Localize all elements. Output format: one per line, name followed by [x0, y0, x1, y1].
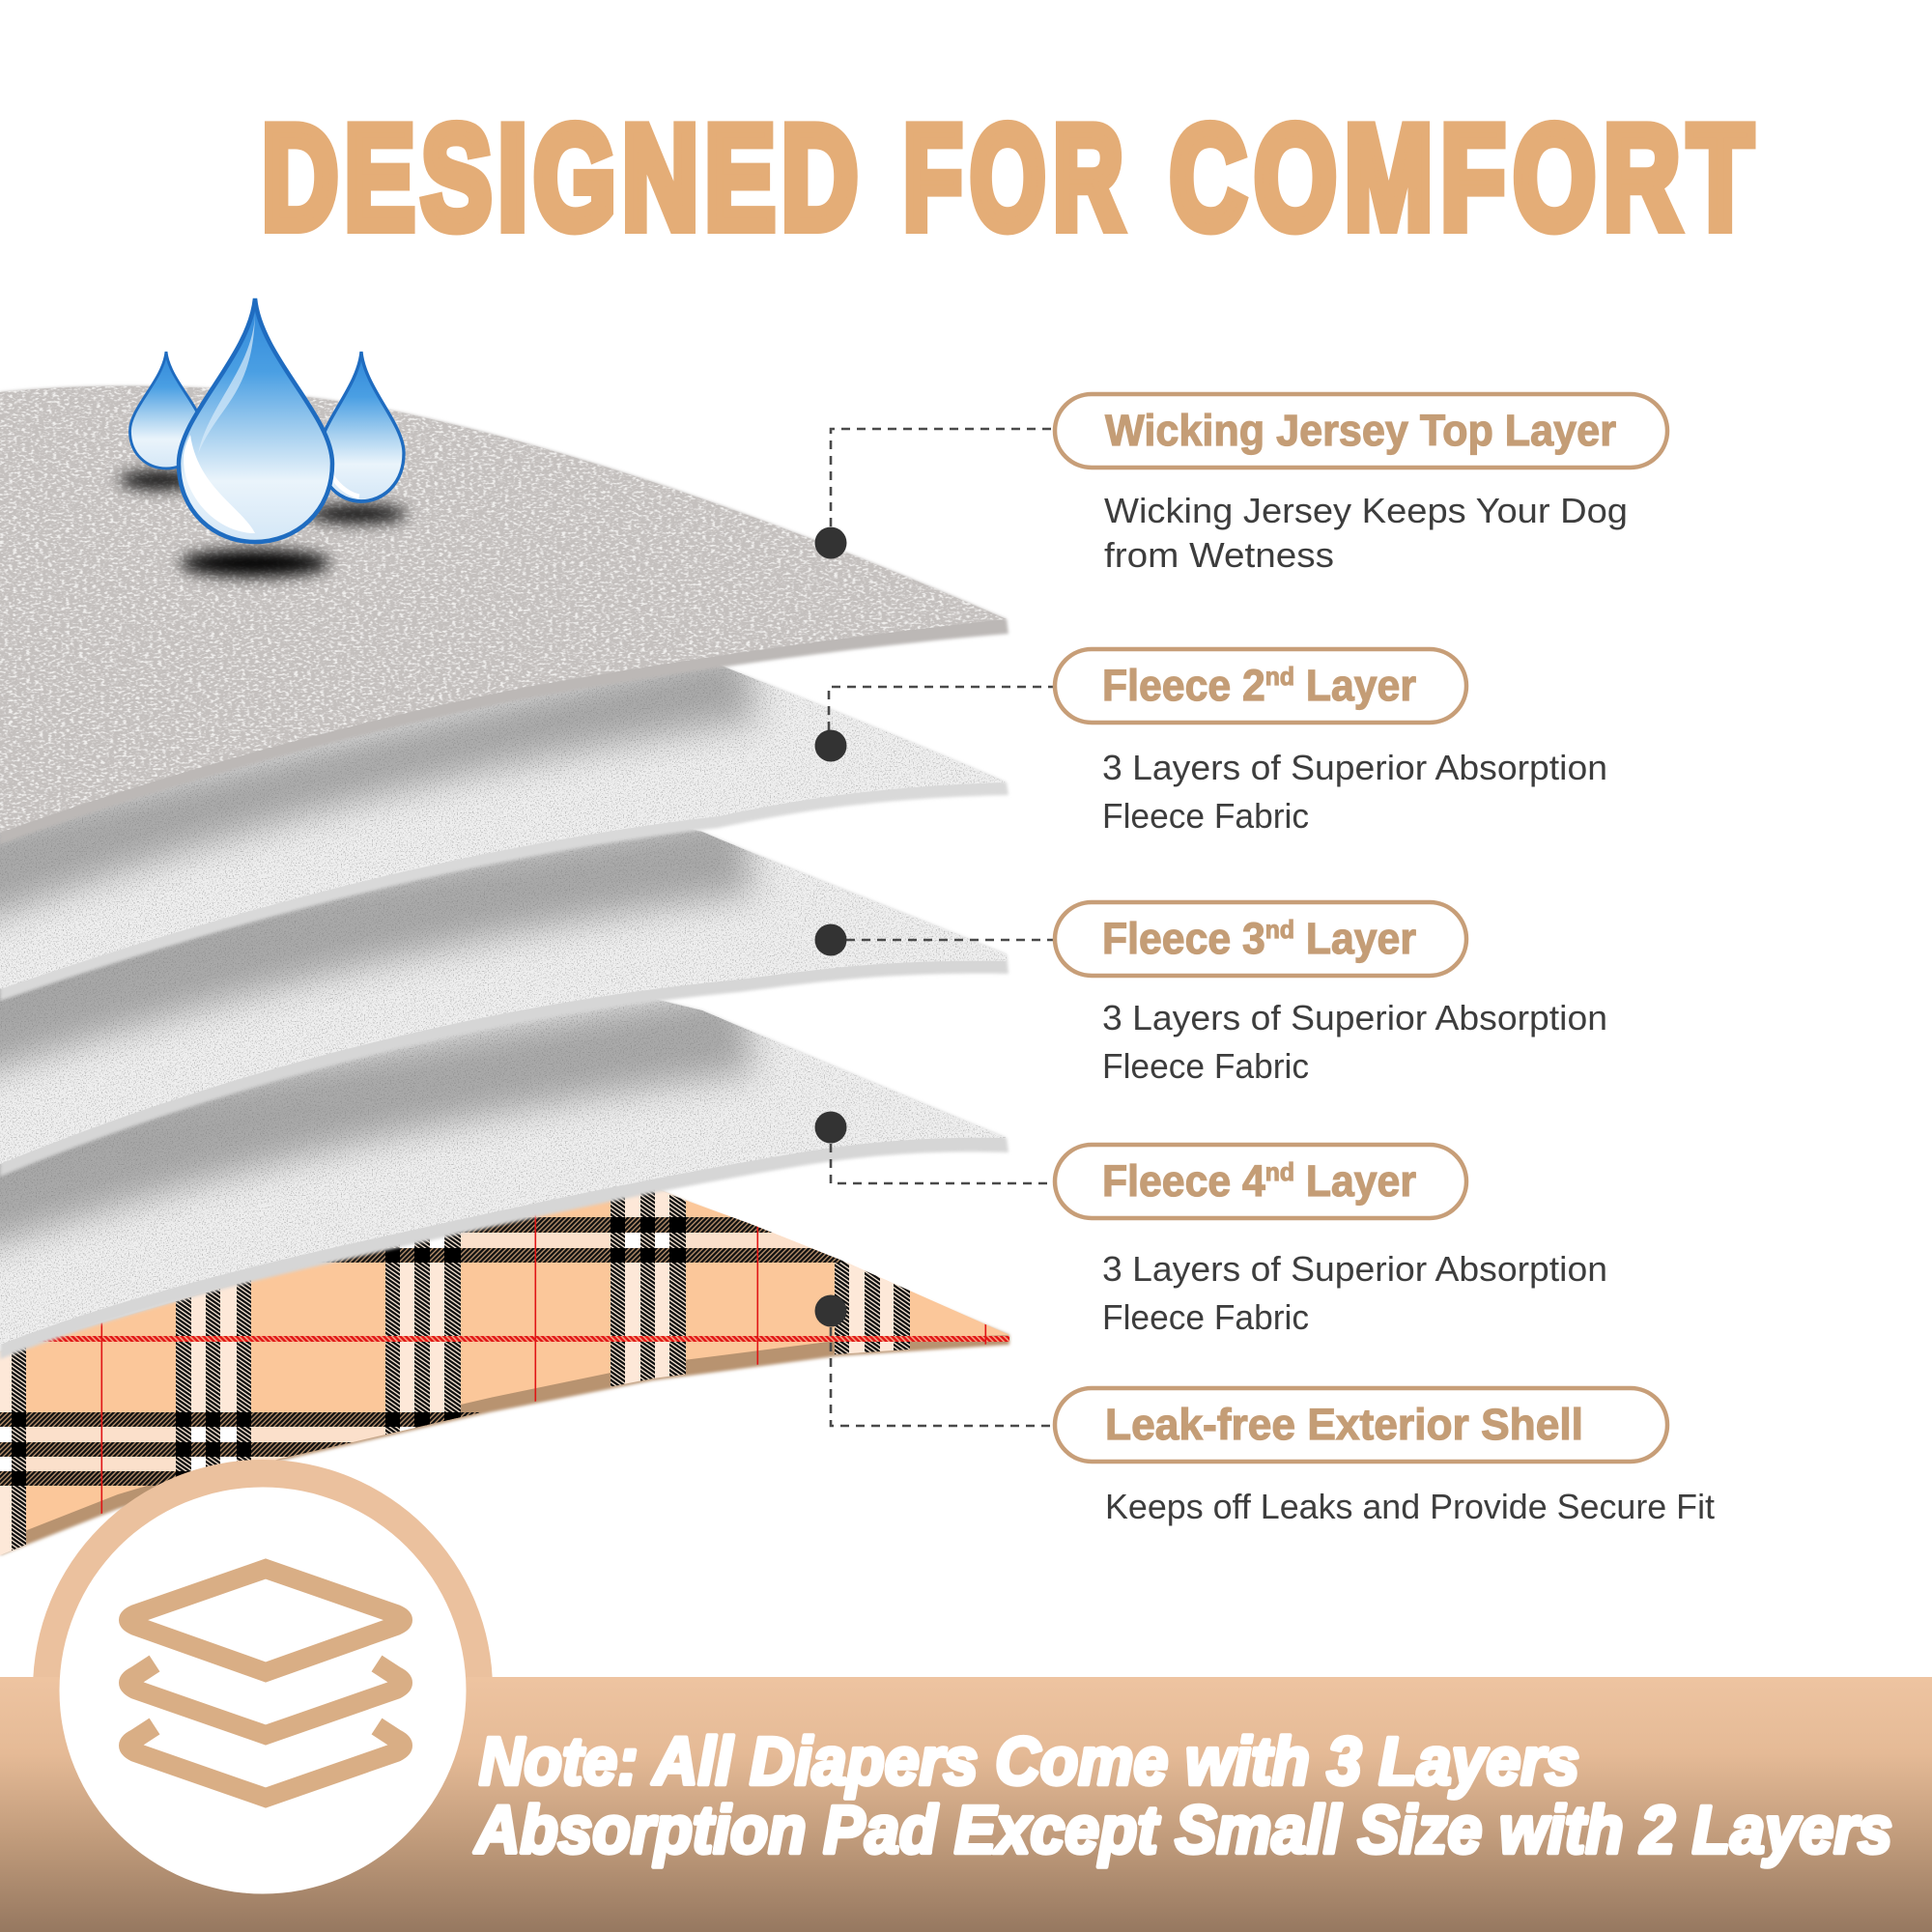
callout: fleece 4th layer: Fleece 4	[1102, 1156, 1274, 1206]
callout: wicking jersey top layer: Wicking Jersey Keeps Your Dog	[1104, 491, 1628, 530]
layer: wicking jersey top	[0, 386, 1009, 844]
layer: fleece 2nd	[0, 642, 1009, 1001]
layer: fleece 4th	[0, 985, 1009, 1359]
callout: leak-free exterior shell	[1055, 1388, 1715, 1526]
connector: fleece 2nd	[815, 687, 1054, 761]
note text: Note: All Diapers Come with 3 Layers	[479, 1723, 1579, 1799]
callout: fleece 4th layer: Layer	[1294, 1156, 1416, 1206]
callout: fleece 2nd layer	[1055, 649, 1607, 836]
callout: leak-free exterior shell: Keeps off Leaks and Provide Secure Fit	[1105, 1487, 1715, 1526]
callout: fleece 4th layer: nd	[1265, 1157, 1294, 1186]
connector: top layer	[815, 429, 1054, 558]
callout: fleece 4th layer: 3 Layers of Superior Absorption	[1102, 1249, 1607, 1289]
callout: fleece 2nd layer: Fleece 2	[1102, 661, 1274, 710]
layer: plaid leak-free exterior shell	[0, 1190, 1012, 1557]
icon: stacked layers	[60, 1488, 466, 1893]
callout: wicking jersey top layer: Wicking Jersey Top Layer	[1105, 406, 1616, 455]
callout: fleece 3rd layer: nd	[1265, 915, 1294, 944]
circle ring behind footer	[33, 1460, 493, 1919]
callout: leak-free exterior shell: Leak-free Exterior Shell	[1105, 1400, 1583, 1449]
callout: fleece 2nd layer: Fleece Fabric	[1102, 796, 1309, 836]
title: FOR	[903, 96, 1123, 260]
note text	[473, 1723, 1892, 1867]
callout: wicking jersey top layer	[1055, 394, 1667, 575]
callout: fleece 4th layer	[1055, 1145, 1607, 1337]
callout: fleece 3rd layer: Fleece Fabric	[1102, 1046, 1309, 1086]
callout: fleece 3rd layer	[1055, 902, 1607, 1086]
connector: fleece 3rd	[815, 923, 1054, 956]
connector: fleece 4th	[815, 1111, 1054, 1183]
callout: fleece 2nd layer: Layer	[1294, 661, 1416, 710]
layer: fleece 3rd	[0, 807, 1009, 1177]
callout: fleece 4th layer: Fleece Fabric	[1102, 1297, 1309, 1337]
callout: wicking jersey top layer: from Wetness	[1104, 535, 1334, 575]
callout: fleece 3rd layer: Layer	[1294, 914, 1416, 963]
title: COMFORT	[1170, 96, 1752, 260]
callout: fleece 2nd layer: 3 Layers of Superior Absorption	[1102, 748, 1607, 787]
callout: fleece 3rd layer: Fleece 3	[1102, 914, 1274, 963]
callout: fleece 2nd layer: nd	[1265, 662, 1294, 691]
callout: fleece 3rd layer: 3 Layers of Superior Absorption	[1102, 998, 1607, 1037]
connector: exterior shell	[815, 1294, 1054, 1426]
icon: water drops	[119, 298, 408, 577]
title	[262, 96, 1752, 260]
footer band	[0, 1677, 1932, 1932]
title: DESIGNED	[262, 96, 858, 260]
